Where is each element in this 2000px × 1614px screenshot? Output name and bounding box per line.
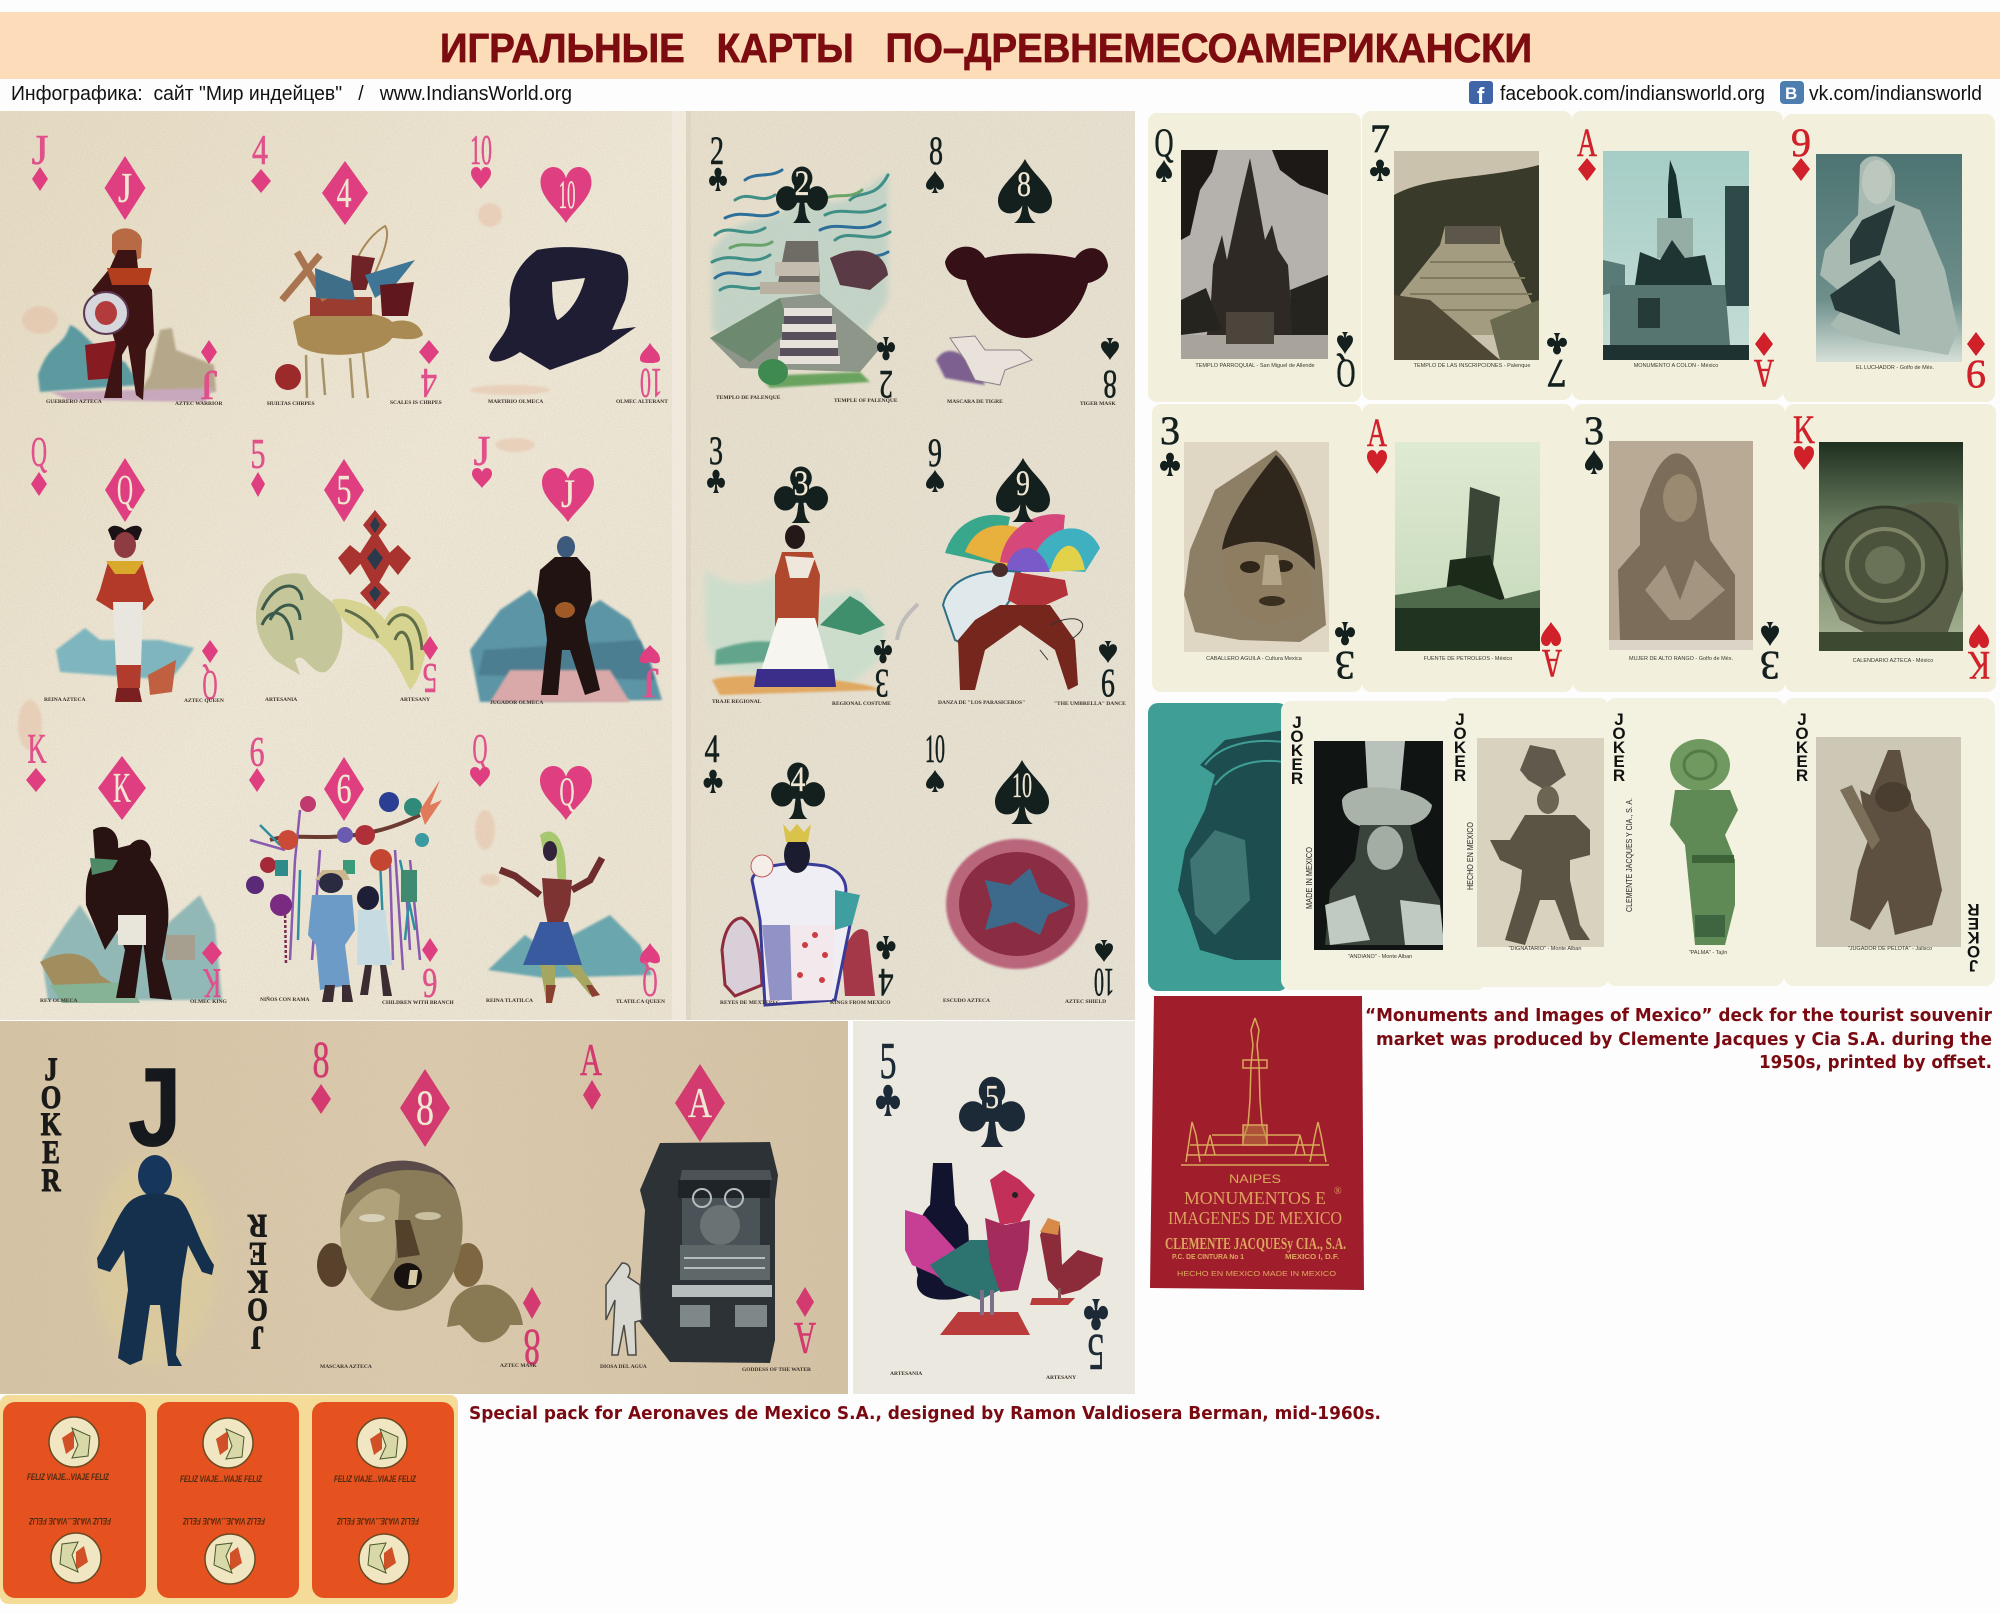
illustration: aztec warrior <box>38 228 216 402</box>
joker card: palma: O <box>1612 724 1626 743</box>
big diamond with number <box>322 161 368 225</box>
card: two of clubs: 2 <box>710 128 724 173</box>
big heart with number <box>540 167 592 223</box>
card: nine of spades <box>926 430 1126 707</box>
vertical joker label: O <box>41 1079 61 1116</box>
card: queen of hearts: Q <box>472 727 488 773</box>
big diamond with number <box>324 459 364 522</box>
box address <box>1172 1252 1339 1261</box>
panel: five of clubs card: 5 <box>880 1033 896 1090</box>
joker card: andiano: J <box>1292 713 1302 732</box>
illustration: fruit branch and children <box>246 780 442 1002</box>
card: nine of diamonds, wrestler <box>1783 114 1995 402</box>
panel: five of clubs card: ARTESANY <box>1046 1375 1076 1381</box>
big diamond with number <box>324 757 364 821</box>
big spade with number <box>996 458 1050 522</box>
card: four of diamonds <box>251 128 442 407</box>
card: three of clubs <box>705 428 918 707</box>
card: queen of spades, parish church <box>1148 113 1361 402</box>
card: queen of hearts: TLATILCA QUEEN <box>616 999 665 1005</box>
illustration: goddess of the water statue <box>638 1142 778 1363</box>
photo: monument <box>1603 151 1749 360</box>
card: six of diamonds <box>246 730 454 1006</box>
card: six of diamonds: 6 <box>250 730 264 776</box>
box label: naipes: NAIPES <box>1229 1172 1281 1186</box>
joker card: andiano: E <box>1291 755 1303 774</box>
card: king of diamonds: K <box>28 727 46 773</box>
card: six of diamonds: 6 <box>422 959 438 1005</box>
card: three of clubs, eagle knight <box>1152 404 1362 692</box>
card: ace of hearts, oil fountain: A <box>1542 641 1562 686</box>
illustration: aztec queen <box>56 526 194 702</box>
card: queen of spades, parish church: TEMPLO PARROQUIAL - San Miguel de Allende <box>1195 363 1315 369</box>
big diamond with letter: A <box>688 1081 713 1127</box>
card: four of clubs: 4 <box>704 726 720 771</box>
illustration: roosters <box>256 573 428 690</box>
joker card: andiano: MADE IN MEXICO <box>1305 847 1314 909</box>
card: eight of spades: 8 <box>1103 362 1117 407</box>
big spade with number <box>995 760 1049 824</box>
box title: IMAGENES DE MEXICO <box>1168 1208 1342 1228</box>
big diamond with letter: J <box>118 166 132 212</box>
joker card: ball player: K <box>1967 928 1980 947</box>
card: jack of hearts <box>470 429 662 706</box>
big spade with number <box>998 159 1052 223</box>
rotated joker label <box>247 1207 268 1356</box>
illustration: king and queen figures <box>40 827 222 1003</box>
card: queen of spades, parish church: Q <box>1154 120 1174 165</box>
card: eight of spades: 8 <box>929 128 943 173</box>
rotated joker label: K <box>247 1263 268 1300</box>
big heart with letter <box>542 468 594 522</box>
joker card: dignatario: O <box>1453 724 1467 743</box>
illustration: green palma statue <box>1670 739 1738 945</box>
card: jack of hearts: J <box>643 659 659 705</box>
card: ten of hearts: OLMEC ALTERANT <box>616 399 668 405</box>
card: five of diamonds: ARTESANY <box>400 697 430 703</box>
card: king of diamonds: OLMEC KING <box>190 999 228 1005</box>
big club with number <box>776 163 828 223</box>
card: two of clubs: TEMPLO DE PALENQUE <box>716 395 781 401</box>
illustration: man beside statue <box>606 1263 642 1355</box>
card: eight of diamonds <box>311 1032 541 1375</box>
card: ten of spades: 10 <box>1094 960 1114 1005</box>
photo: fountain tower <box>1395 442 1540 651</box>
card: jack of hearts: J <box>474 429 490 475</box>
card: two of clubs <box>709 128 898 407</box>
card: ace of hearts, oil fountain <box>1362 404 1573 692</box>
card: three of clubs, eagle knight: 3 <box>1160 408 1180 453</box>
big heart with letter: J <box>561 471 575 516</box>
card: ace of diamonds <box>580 1034 816 1373</box>
joker card: dignatario <box>1443 698 1609 987</box>
joker card: andiano <box>1281 701 1486 990</box>
card: eight of diamonds: MASCARA AZTECA <box>320 1364 372 1370</box>
big diamond with letter <box>98 756 146 820</box>
card: four of clubs: KINGS FROM MEXICO <box>830 1000 891 1006</box>
photo: seated statue <box>1609 441 1753 650</box>
big spade with number: 10 <box>1012 765 1032 805</box>
card: three of spades, high-ranking woman: 3 <box>1584 408 1604 453</box>
card: five of diamonds <box>250 432 438 703</box>
joker card: andiano: O <box>1290 727 1304 746</box>
joker card: ball player: R <box>1967 900 1980 919</box>
big heart with letter <box>540 766 592 820</box>
card: seven of clubs, temple of inscriptions: 7 <box>1370 116 1390 161</box>
card: ten of spades: 10 <box>925 726 945 771</box>
card back 3: FELIZ VIAJE...VIAJE FELIZ <box>334 1474 416 1484</box>
joker card: ball player <box>1784 698 1995 986</box>
card: two of clubs: 2 <box>879 362 893 407</box>
title banner <box>0 12 2000 79</box>
joker card: ball player: E <box>1796 752 1808 771</box>
big diamond with number: 6 <box>336 767 352 813</box>
card: queen of diamonds: Q <box>31 430 47 476</box>
illustration: temple of palenque <box>710 170 890 388</box>
card: king of hearts, aztec calendar: K <box>1793 407 1815 452</box>
joker card: palma: "PALMA" - Tajín <box>1689 950 1727 956</box>
vertical joker label <box>41 1051 61 1199</box>
panel: five of clubs card: 5 <box>1088 1323 1104 1380</box>
card: ten of hearts: 10 <box>640 359 662 405</box>
big diamond with letter <box>104 156 146 220</box>
card: six of diamonds: CHILDREN WITH BRANCH <box>382 1000 454 1006</box>
card: eight of diamonds: 8 <box>524 1318 540 1375</box>
big club with number: 2 <box>794 163 810 203</box>
photo: wrestler statue <box>1816 154 1962 362</box>
big diamond with number: 8 <box>416 1079 434 1135</box>
card: four of diamonds: HUILTAS CHRPES <box>267 401 315 407</box>
rotated joker label: O <box>247 1291 268 1328</box>
joker card: ball player: O <box>1967 942 1980 961</box>
big diamond with number <box>400 1069 450 1147</box>
icon: vk <box>1780 81 1804 104</box>
icon: facebook <box>1469 81 1493 108</box>
card: nine of spades: 9 <box>928 430 942 475</box>
joker card: palma <box>1606 698 1784 986</box>
big diamond with letter <box>105 458 145 522</box>
card: ace of diamonds, columbus monument: A <box>1754 351 1774 396</box>
photo: ball player <box>1816 737 1961 947</box>
card: queen of spades, parish church: Q <box>1336 351 1356 396</box>
big letter J: J <box>124 1049 186 1182</box>
joker card: palma: J <box>1614 710 1624 729</box>
vertical joker label: J <box>44 1051 58 1088</box>
big club with number <box>959 1077 1025 1147</box>
illustration: dark stone yoke <box>489 247 636 370</box>
panel: card back and jokers <box>1148 698 1995 991</box>
card: three of spades, high-ranking woman: MUJER DE ALTO RANGO - Golfo de Méx. <box>1629 656 1733 662</box>
joker card: ball player: J <box>1797 710 1807 729</box>
card: two of clubs: TEMPLE OF PALENQUE <box>834 398 898 404</box>
card: queen of diamonds: AZTEC QUEEN <box>184 698 224 704</box>
joker card: ball player: "JUGADOR DE PELOTA" - Jalisco <box>1848 946 1932 952</box>
card: three of clubs: 3 <box>709 428 723 473</box>
card back: maya head on teal <box>1148 703 1288 991</box>
card: king of diamonds: K <box>203 959 221 1005</box>
card: jack of diamonds: GUERRERO AZTECA <box>46 399 102 405</box>
box maker: CLEMENTE JACQUESy CIA., S.A. <box>1165 1234 1346 1253</box>
card: nine of spades: DANZA DE "LOS PARASICEROS" <box>938 700 1025 706</box>
panel: red card box <box>1150 996 1364 1290</box>
card: four of diamonds: 4 <box>421 359 437 405</box>
joker card: dignatario: J <box>1455 710 1465 729</box>
illustration: small mask <box>447 1285 523 1342</box>
card: three of clubs: REGIONAL COSTUME <box>832 701 891 707</box>
card: nine of spades: "THE UMBRELLA" DANCE <box>1054 701 1126 707</box>
card back 3: FELIZ VIAJE...VIAJE FELIZ <box>337 1516 419 1526</box>
card: ten of spades <box>925 726 1114 1005</box>
card: eight of diamonds: AZTEC MASK <box>500 1363 538 1369</box>
big diamond with letter: K <box>113 766 131 812</box>
card: jack of diamonds: J <box>200 361 218 407</box>
panel: diamonds and hearts sheet <box>0 111 686 1020</box>
card: ace of hearts, oil fountain: FUENTE DE PETROLEOS - México <box>1424 656 1512 662</box>
box address: MEXICO I, D.F. <box>1285 1252 1339 1261</box>
card: three of spades, high-ranking woman <box>1573 404 1785 692</box>
card: seven of clubs, temple of inscriptions: 7 <box>1547 351 1567 396</box>
joker card: ball player: J <box>1969 956 1978 975</box>
card: queen of diamonds: Q <box>202 661 218 707</box>
joker card: andiano: K <box>1291 741 1304 760</box>
vertical joker label: E <box>42 1134 60 1171</box>
box title <box>1168 1186 1342 1228</box>
illustration: ballplayer and pyramid <box>470 536 662 702</box>
big heart with letter: Q <box>560 769 575 814</box>
card: ace of hearts, oil fountain: A <box>1367 410 1387 455</box>
illustration: large rooster <box>905 1170 1035 1335</box>
card: ace of diamonds: A <box>794 1313 816 1364</box>
illustration: woman in regional dress <box>705 525 918 695</box>
panel: joker, eight and ace sheet <box>0 1021 848 1394</box>
card back 3 <box>312 1402 454 1598</box>
title: ИГРАЛЬНЫЕ КАРТЫ ПО–ДРЕВНЕМЕСОАМЕРИКАНСКИ <box>440 25 1532 71</box>
joker card: andiano: R <box>1291 769 1303 788</box>
illustration: aztec shield disc <box>946 839 1088 969</box>
joker card: palma: E <box>1613 752 1625 771</box>
card: queen of hearts: REINA TLATILCA <box>486 998 533 1004</box>
vertical joker label: R <box>41 1162 61 1199</box>
card: king of diamonds: REY OLMECA <box>40 998 78 1004</box>
card: joker <box>41 1049 268 1366</box>
card: four of diamonds: SCALES IS CHRPES <box>390 400 442 406</box>
illustration: woven ornament <box>338 510 411 610</box>
joker card: ball player: O <box>1795 724 1809 743</box>
card: four of clubs <box>704 726 896 1006</box>
photo: calendar stone <box>1819 442 1963 651</box>
card: three of clubs, eagle knight: CABALLERO AGUILA - Cultura Mexica <box>1206 656 1303 662</box>
panel: five of clubs card: ARTESANIA <box>890 1371 922 1377</box>
card: ten of hearts: 10 <box>470 128 492 174</box>
card: five of diamonds: 5 <box>422 654 438 700</box>
card: queen of hearts <box>470 727 665 1005</box>
joker card: palma: CLEMENTE JACQUES Y CIA., S. A. <box>1625 798 1634 912</box>
panel: five of clubs card <box>853 1021 1135 1394</box>
illustration: woven basket <box>275 226 423 398</box>
card: four of clubs: 4 <box>878 960 894 1005</box>
caption: monuments deck <box>1365 1005 1992 1073</box>
big spade with number: 8 <box>1017 164 1031 204</box>
panel: clubs and spades sheet <box>686 111 1135 1020</box>
card back 2: FELIZ VIAJE...VIAJE FELIZ <box>180 1474 262 1484</box>
big diamond with number: 5 <box>336 468 352 514</box>
card: ten of hearts <box>470 128 668 405</box>
card back 2: FELIZ VIAJE...VIAJE FELIZ <box>183 1516 265 1526</box>
big diamond with letter <box>675 1064 725 1142</box>
joker card: dignatario: HECHO EN MEXICO <box>1466 822 1475 890</box>
card: four of clubs: REYES DE MEXTEPEC <box>720 1000 780 1006</box>
big spade with number: 9 <box>1016 463 1030 503</box>
joker card: dignatario: K <box>1454 738 1467 757</box>
card: seven of clubs, temple of inscriptions: TEMPLO DE LAS INSCRIPCIONES - Palenque <box>1414 363 1530 369</box>
card: three of spades, high-ranking woman: 3 <box>1760 643 1780 688</box>
big heart with number: 10 <box>558 172 576 217</box>
big club with number <box>774 463 828 523</box>
illustration: three kings <box>722 824 875 1005</box>
photo: andiano figure <box>1314 741 1444 950</box>
card: ten of spades: AZTEC SHIELD <box>1065 999 1106 1005</box>
card: nine of spades: 9 <box>1101 661 1115 706</box>
joker card: palma: K <box>1613 738 1626 757</box>
illustration: tlatilco queen <box>488 832 652 1003</box>
card back 1 <box>3 1402 146 1598</box>
photo: gothic church <box>1181 150 1328 359</box>
card: queen of diamonds: REINA AZTECA <box>44 697 85 703</box>
vertical joker label: K <box>41 1106 61 1143</box>
card: six of diamonds: NIÑOS CON RAMA <box>260 995 310 1003</box>
joker card: dignatario: "DIGNATARIO" - Monte Alban <box>1509 946 1581 952</box>
facebook link: facebook.com/indiansworld.org <box>1500 83 1765 105</box>
joker card: dignatario: E <box>1454 752 1466 771</box>
big diamond with number: 4 <box>336 171 352 217</box>
rotated joker label: E <box>249 1235 266 1272</box>
big club with number <box>771 759 825 819</box>
illustration: blue figure <box>93 1155 217 1366</box>
panel: monuments photo cards <box>1148 111 1996 692</box>
card: jack of diamonds: J <box>32 128 48 174</box>
card: king of hearts, aztec calendar: CALENDARIO AZTECA - México <box>1853 658 1933 664</box>
source credit: Инфографика: сайт "Мир индейцев" / www.IndiansWorld.org <box>11 83 572 105</box>
card: queen of hearts: Q <box>642 958 658 1004</box>
big club with number: 5 <box>985 1079 999 1116</box>
panel: airline pack backs <box>0 1395 458 1604</box>
rotated joker label: R <box>248 1207 267 1244</box>
joker card: palma: R <box>1613 766 1625 785</box>
rotated joker label: J <box>251 1319 264 1356</box>
photo: dignitary figure <box>1477 738 1604 947</box>
card: ace of diamonds, columbus monument: MONUMENTO A COLON - México <box>1634 363 1718 369</box>
card: king of hearts, aztec calendar <box>1785 404 1996 692</box>
joker card: andiano: "ANDIANO" - Monte Alban <box>1348 954 1412 960</box>
card: three of clubs: TRAJE REGIONAL <box>712 699 762 705</box>
card: jack of diamonds <box>32 128 223 407</box>
card: eight of spades: MASCARA DE TIGRE <box>947 399 1003 405</box>
card: ace of diamonds: GODDESS OF THE WATER <box>742 1367 812 1373</box>
card: eight of spades: TIGER MASK <box>1080 401 1116 407</box>
illustration: black jug <box>915 1163 972 1300</box>
box address: P.C. DE CINTURA No 1 <box>1172 1252 1244 1261</box>
illustration: tiger mask <box>945 247 1108 338</box>
illustration: umbrella dancer <box>943 514 1100 690</box>
illustration: small jaguar <box>936 336 1032 385</box>
joker card: ball player: E <box>1968 914 1979 933</box>
card: ace of diamonds: A <box>580 1034 602 1085</box>
photo: pyramid in forest <box>1394 151 1539 360</box>
card: king of diamonds <box>26 727 228 1005</box>
card back 2 <box>157 1402 299 1598</box>
card: three of clubs, eagle knight: 3 <box>1335 643 1355 688</box>
icon: facebook: f <box>1477 83 1485 108</box>
box origin: HECHO EN MEXICO MADE IN MEXICO <box>1177 1269 1336 1278</box>
card: ace of diamonds, columbus monument <box>1572 111 1783 400</box>
card: nine of diamonds, wrestler: 9 <box>1791 120 1811 165</box>
gold monument drawing <box>1181 1018 1329 1165</box>
vk link: vk.com/indiansworld <box>1809 83 1982 105</box>
card: ten of hearts: MARTIRIO OLMECA <box>488 399 543 405</box>
big diamond with letter: Q <box>117 468 133 514</box>
illustration: small rooster <box>1030 1218 1103 1305</box>
card: nine of diamonds, wrestler: EL LUCHADOR - Golfo de Méx. <box>1856 365 1934 371</box>
card: queen of diamonds <box>31 430 224 707</box>
card: king of hearts, aztec calendar: K <box>1968 643 1990 688</box>
card: five of diamonds: 5 <box>250 432 266 478</box>
big club with number: 4 <box>790 759 806 799</box>
card: ace of diamonds: DIOSA DEL AGUA <box>600 1364 647 1370</box>
caption: airline pack: Special pack for Aeronaves de Mexico S.A., designed by Ramon Valdiosera Berman, mid-1960s. <box>469 1403 1381 1424</box>
card: ace of diamonds, columbus monument: A <box>1577 120 1597 165</box>
card: eight of spades <box>926 128 1119 407</box>
joker card: ball player: R <box>1796 766 1808 785</box>
card: four of diamonds: 4 <box>252 128 268 174</box>
joker card: ball player: K <box>1796 738 1809 757</box>
illustration: aztec mask <box>317 1161 483 1311</box>
joker card: dignatario: R <box>1454 766 1466 785</box>
card: seven of clubs, temple of inscriptions <box>1362 111 1572 400</box>
card: ten of spades: ESCUDO AZTECA <box>943 998 990 1004</box>
card: eight of diamonds: 8 <box>312 1032 330 1089</box>
card back 1: FELIZ VIAJE...VIAJE FELIZ <box>27 1472 109 1482</box>
social links <box>1469 81 1982 108</box>
box title: ® <box>1334 1186 1342 1197</box>
card: five of diamonds: ARTESANIA <box>265 697 297 703</box>
card: jack of hearts: JUGADOR OLMECA <box>490 700 543 706</box>
photo: eagle knight head <box>1184 442 1329 652</box>
card: three of clubs: 3 <box>875 661 889 706</box>
card: nine of diamonds, wrestler: 9 <box>1966 352 1986 397</box>
big club with number: 3 <box>794 463 808 503</box>
box title: MONUMENTOS E <box>1184 1188 1326 1208</box>
icon: vk: B <box>1785 84 1797 103</box>
card: jack of diamonds: AZTEC WARRIOR <box>175 401 223 407</box>
